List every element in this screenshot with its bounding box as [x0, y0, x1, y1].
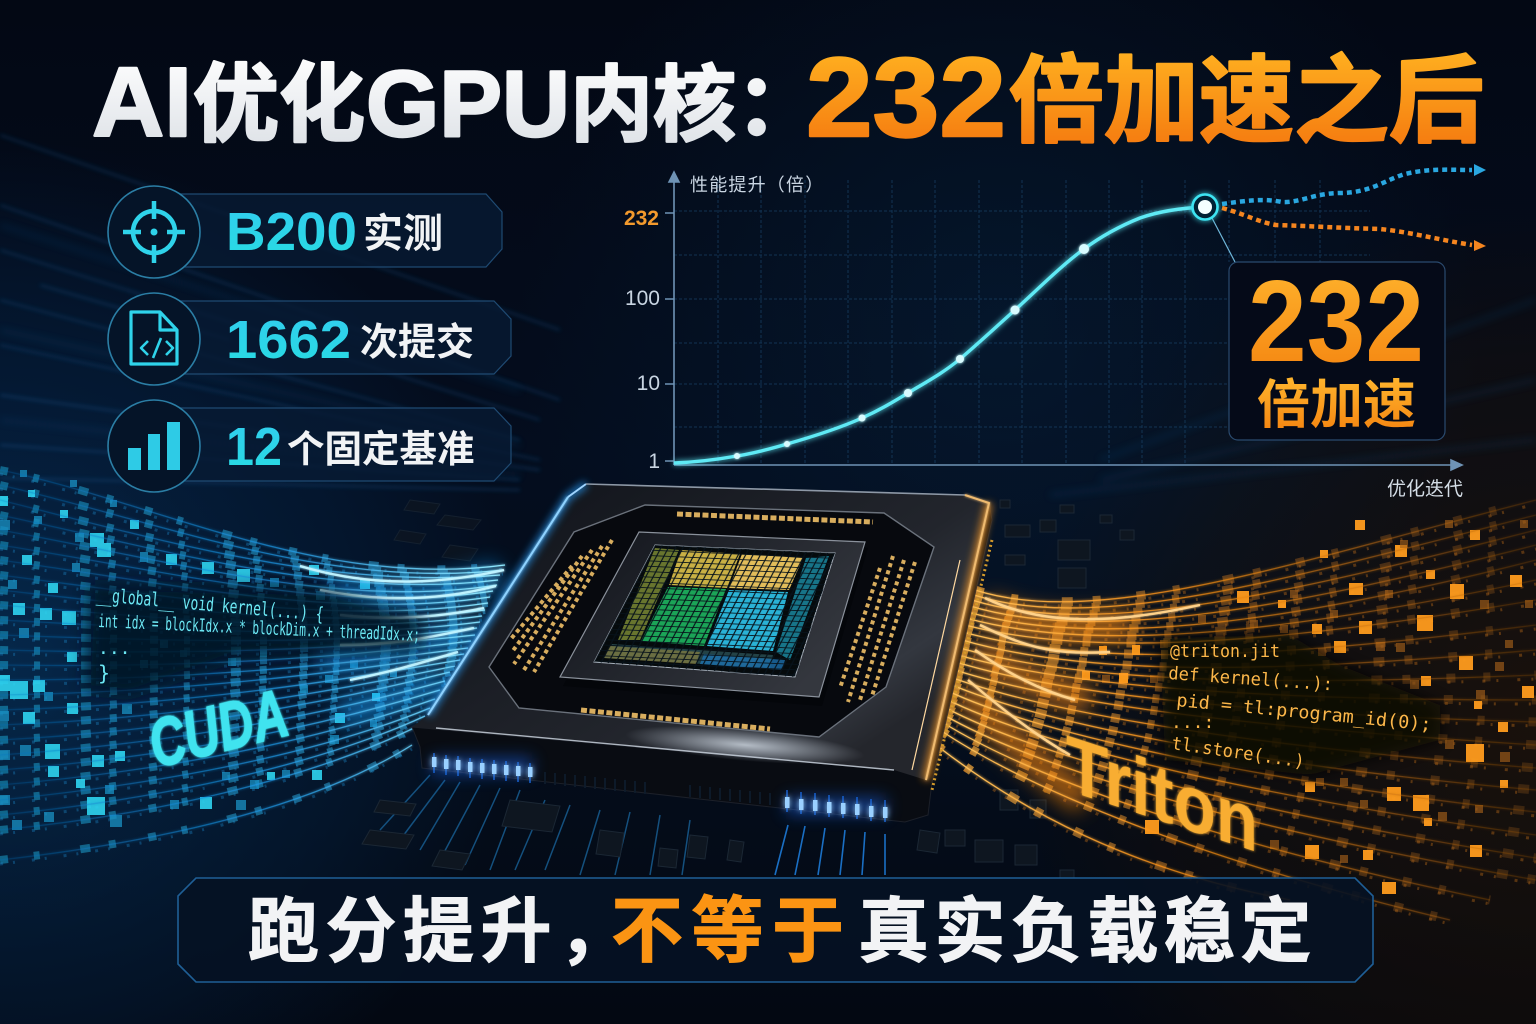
y axis title: 性能提升（倍）: [690, 175, 824, 195]
chart axes: [665, 172, 1462, 470]
data stream: right orange squares: [936, 500, 1536, 924]
chip substrate: [563, 538, 868, 706]
chart grid: [674, 180, 1370, 465]
stat: B200 实测: [108, 186, 502, 278]
chip right edge orange studs: [932, 540, 992, 790]
stat: 1662 次提交: [108, 293, 511, 385]
data stream: right orange flow lines: [936, 500, 1536, 920]
line chart: [624, 164, 1486, 500]
banner text: white tail: 真实负载稳定: [858, 893, 1317, 972]
GPU chip: [412, 484, 992, 822]
title: 232: [806, 35, 1006, 160]
data stream: left blue squares: [0, 470, 505, 864]
forecast orange arrow: [1474, 240, 1486, 251]
chip package top face: [412, 484, 989, 780]
peak leader line: [1212, 218, 1235, 262]
data stream: left blue flow lines: [0, 470, 505, 860]
title: [92, 35, 1484, 160]
label: 实测: 实测: [363, 212, 443, 256]
Triton code snippet: [1160, 635, 1440, 775]
forecast blue arrow: [1474, 164, 1486, 176]
title: GPU: [366, 51, 570, 156]
icon: target: [123, 201, 185, 263]
CUDA code snippet: __global__ void kernel(...) {: [96, 584, 325, 626]
Triton code snippet: def kernel(...):: [1168, 663, 1334, 695]
label: 个固定基准: 个固定基准: [287, 428, 474, 470]
gold contact pads: [510, 514, 915, 729]
die core blocks: [594, 545, 835, 677]
circuit board under chip: [362, 500, 1134, 878]
performance curve: [674, 207, 1205, 463]
peak marker: [1192, 194, 1218, 220]
y axis labels: 1: [648, 450, 660, 473]
chip recessed area: [489, 505, 934, 737]
chip front LEDs: [432, 753, 888, 822]
title: 内核：: [570, 59, 819, 152]
Triton code snippet: tl.store(...): [1170, 733, 1306, 773]
CUDA code snippet: int idx = blockIdx.x * blockDim.x + threadIdx.x;: [98, 611, 420, 646]
label: Triton: Triton: [1066, 719, 1258, 870]
title: AI: [92, 47, 192, 157]
label: B200: B200: [226, 202, 357, 262]
y axis labels: 10: [637, 372, 660, 395]
y axis labels: 100: [625, 287, 660, 310]
callout label: 倍加速: [1257, 376, 1416, 435]
Triton code snippet: ...:: [1171, 712, 1214, 733]
Triton code snippet: @triton.jit: [1170, 641, 1280, 662]
chip sheen: [624, 719, 866, 771]
label: 1662: 1662: [226, 310, 351, 370]
y axis labels: 232: [624, 207, 659, 230]
CUDA code snippet: [85, 584, 425, 695]
chip edge highlights: [428, 484, 989, 780]
CUDA code snippet: ...: [98, 638, 131, 659]
label: CUDA: CUDA: [141, 675, 295, 783]
bottom banner: [178, 878, 1373, 982]
forecast orange dotted: [1222, 208, 1472, 245]
chip die frame: [560, 532, 865, 697]
curve data points: [734, 244, 1089, 459]
label: 次提交: 次提交: [360, 322, 474, 364]
chip package side skirt: [412, 503, 992, 822]
forecast blue dotted: [1222, 170, 1472, 204]
callout number: 232: [1248, 256, 1424, 386]
chip die: [594, 545, 835, 677]
label: 12: 12: [226, 417, 282, 477]
title: 优化: [193, 57, 365, 153]
CUDA code snippet: }: [98, 661, 110, 685]
stat: 12 个固定基准: [108, 400, 511, 492]
callout: 232 倍加速: [1229, 256, 1445, 440]
Triton code snippet: pid = tl:program_id(0);: [1176, 690, 1432, 736]
icon: bar chart: [128, 422, 180, 470]
x axis title: 优化迭代: [1387, 478, 1463, 500]
icon: code file: [131, 312, 177, 364]
banner text: orange: 不等于: [611, 892, 853, 972]
title: 倍加速之后: [1009, 49, 1484, 155]
y axis labels: [624, 207, 660, 473]
banner text: white lead: 跑分提升，: [248, 893, 636, 972]
